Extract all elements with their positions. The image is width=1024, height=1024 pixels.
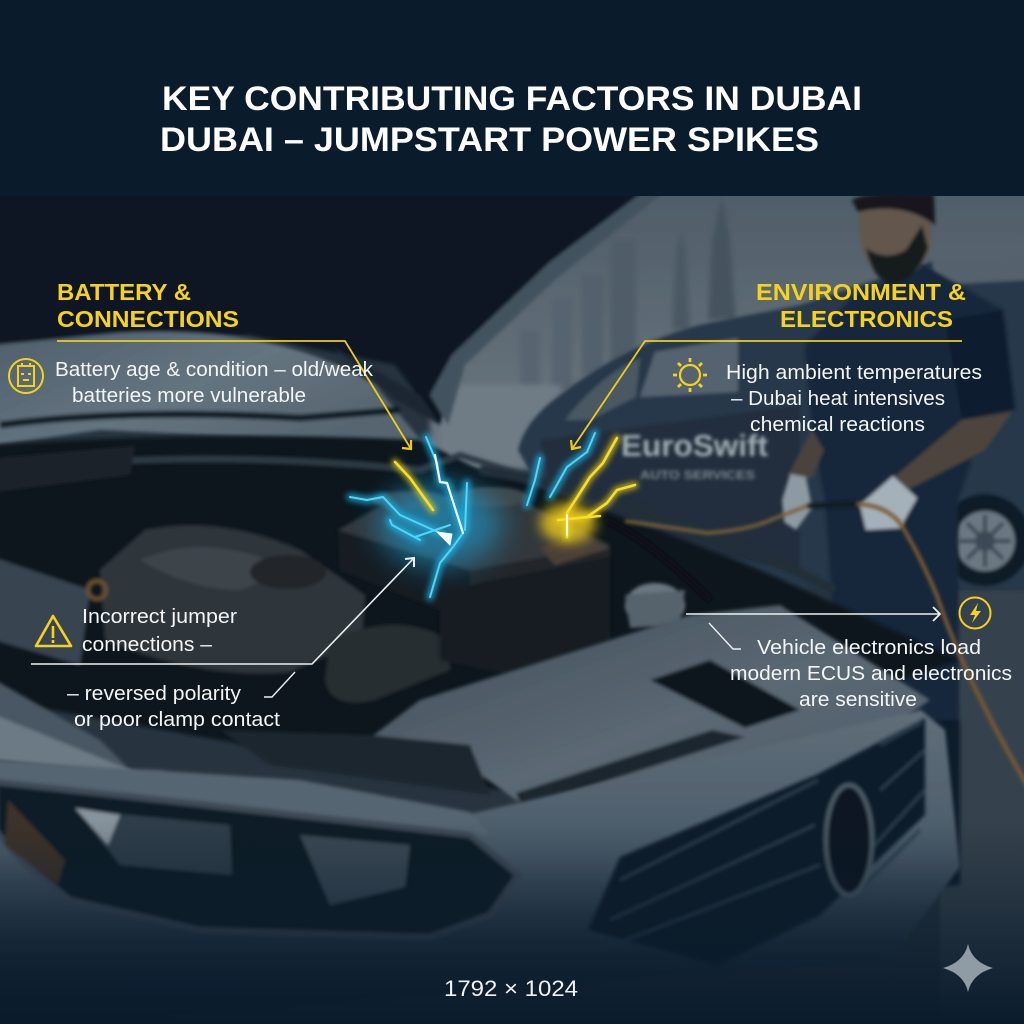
text: high ambient temperatures: chemical reactions [750,414,925,436]
car battery [338,487,710,675]
section heading: environment and electronics [756,279,966,332]
dimension caption: 1792 × 1024 [444,976,578,1001]
van logo text [621,428,768,482]
ground at right [940,590,1024,1024]
text: reversed polarity: or poor clamp contact [74,709,280,731]
header band [0,0,1024,196]
jumper cable [625,504,1024,790]
open hood underside [0,190,665,445]
icon: sun [673,358,707,392]
section heading: battery and connections [57,279,239,332]
section heading: environment and electronics: ENVIRONMENT & [756,279,966,305]
title [160,80,862,159]
icon: lightning bolt [960,598,990,628]
van logo text: EuroSwift [621,428,768,463]
text: incorrect jumper connections: Incorrect jumper [82,606,237,628]
text: vehicle electronics load [730,637,1012,711]
white arrow to battery [31,558,414,664]
section heading: battery and connections: BATTERY & [57,279,191,305]
yellow arrow to blue spark [57,341,411,449]
icon: battery [9,359,43,393]
small connector line [709,623,741,649]
radiator grille with badge [588,718,925,965]
white arrow to electronics icon [686,607,940,621]
icon: sparkle [943,944,993,992]
text: vehicle electronics load: Vehicle electronics load [757,637,981,659]
blue electric spark [350,433,595,597]
bottom fade [0,820,1024,1024]
service van [518,255,1024,590]
text: vehicle electronics load: are sensitive [799,689,917,711]
van logo text: AUTO SERVICES [640,468,755,482]
text: battery age [55,359,374,407]
text: incorrect jumper connections [82,606,237,656]
icon: warning triangle [36,616,71,646]
section heading: environment and electronics: ELECTRONICS [780,306,953,332]
text: high ambient temperatures: – Dubai heat intensives [731,388,945,410]
title: KEY CONTRIBUTING FACTORS IN DUBAI [162,80,862,118]
section heading: battery and connections: CONNECTIONS [57,306,239,332]
yellow electric spark [395,438,635,543]
text: reversed polarity: – reversed polarity [67,683,241,705]
text: high ambient temperatures [726,362,982,436]
title: DUBAI – JUMPSTART POWER SPIKES [160,121,819,159]
car front bumper and body [0,710,960,1024]
small connector line [264,672,295,697]
headlight [0,782,518,937]
text: reversed polarity [67,683,280,731]
text: incorrect jumper connections: connections – [82,634,213,656]
hood front panel [0,605,930,810]
text: high ambient temperatures: High ambient temperatures [726,362,982,384]
city skyline behind the car [430,190,1024,470]
text: battery age: Battery age & condition – old/weak [55,359,374,381]
text: vehicle electronics load: modern ECUS and electronics [730,663,1012,685]
mechanic [782,193,1015,890]
engine bay [0,436,960,790]
yellow arrow to yellow spark [571,341,962,449]
text: battery age: batteries more vulnerable [72,385,306,407]
